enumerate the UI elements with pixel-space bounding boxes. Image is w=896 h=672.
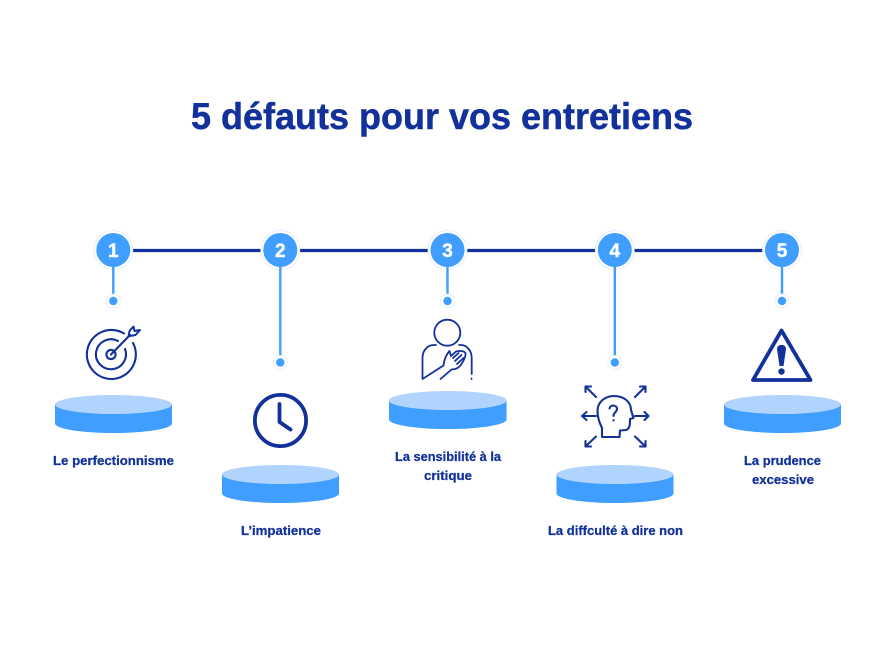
- number badge 2: 2: [275, 241, 286, 262]
- number badge 2: [261, 230, 300, 270]
- label 5: La prudence: [744, 454, 821, 468]
- label 5: [744, 454, 821, 487]
- number badge 1: 1: [108, 241, 119, 262]
- label 3: critique: [424, 469, 472, 483]
- connector and end dot 1: [106, 266, 120, 308]
- connector and end dot 3: [440, 266, 454, 308]
- step 5: la prudence excessive: [724, 230, 841, 487]
- podium 4: [556, 465, 674, 503]
- number badge 3: 3: [442, 241, 453, 262]
- icon: clock: [255, 395, 306, 446]
- podium 1: [55, 395, 172, 433]
- podium 5: [724, 395, 841, 433]
- icon: person with hand on heart: [422, 320, 472, 379]
- label 3: [395, 450, 502, 483]
- podium 2: [222, 465, 339, 503]
- title: 5 défauts pour vos entretiens: [191, 96, 693, 137]
- connector and end dot 2: [273, 266, 287, 370]
- number badge 1: [94, 230, 133, 270]
- number badge 4: [595, 230, 634, 270]
- label 4: La diffculté à dire non: [548, 524, 683, 538]
- step 4: la difficulte a dire non: [548, 230, 683, 538]
- connector and end dot 4: [608, 266, 622, 370]
- number badge 3: [428, 230, 467, 270]
- podium 3: [389, 391, 507, 429]
- label 2: L’impatience: [241, 524, 321, 538]
- timeline line: [113, 249, 782, 252]
- number badge 5: [762, 230, 802, 270]
- label 3: La sensibilité à la: [395, 450, 502, 464]
- label 5: excessive: [752, 473, 814, 487]
- connector and end dot 5: [775, 266, 789, 308]
- icon: target with dart: [87, 326, 140, 379]
- step 2: l'impatience: [222, 230, 339, 538]
- step 1: le perfectionnisme: [53, 230, 174, 468]
- number badge 4: 4: [610, 241, 621, 262]
- icon: head with question mark and arrows: [582, 386, 648, 446]
- step 3: la sensibilite a la critique: [389, 230, 507, 483]
- number badge 5: 5: [777, 241, 788, 262]
- label 1: Le perfectionnisme: [53, 454, 174, 468]
- icon: warning triangle: [753, 330, 810, 380]
